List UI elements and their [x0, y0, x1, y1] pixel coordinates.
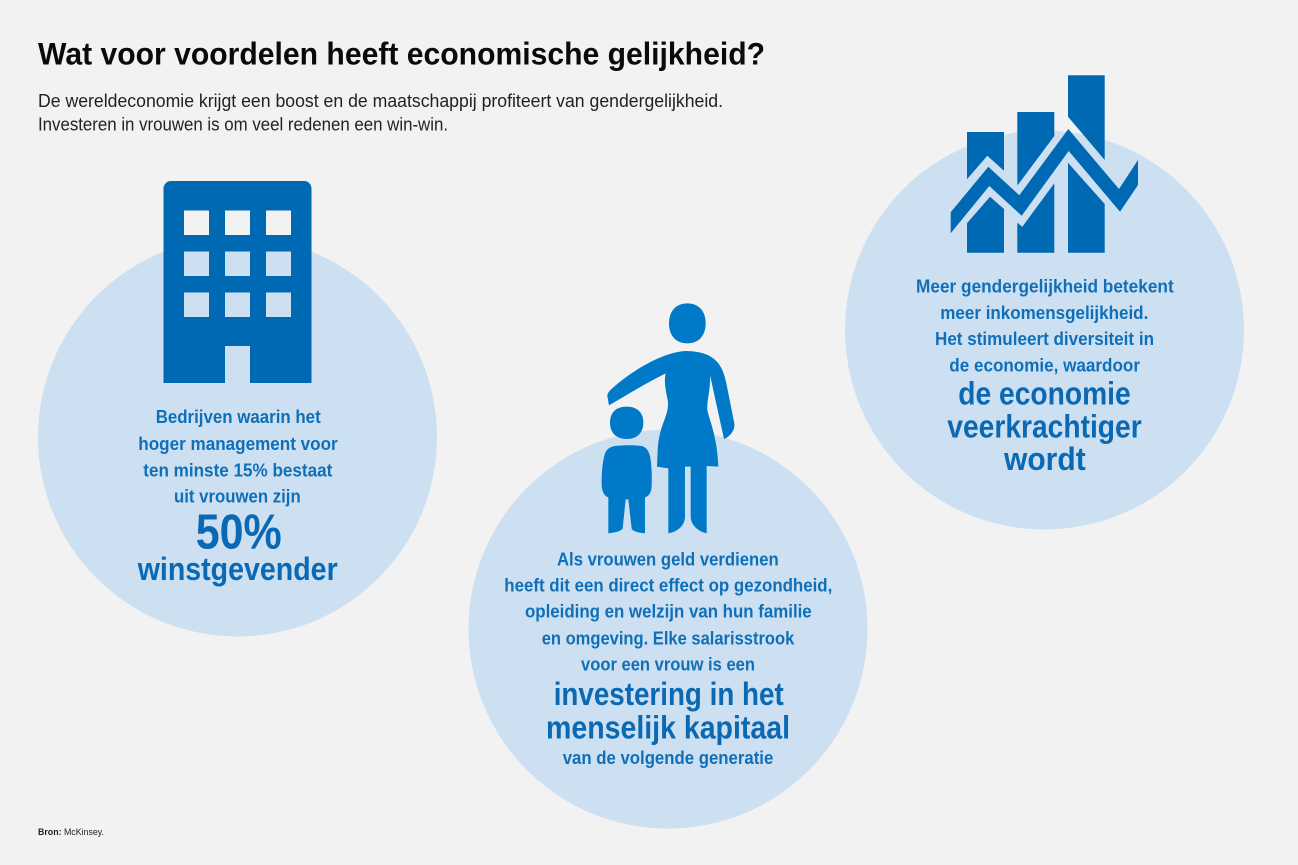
icon part: child head [610, 407, 643, 439]
panel: investering [468, 303, 868, 828]
highlight: de economie veerkrachtiger wordt: de economie [958, 375, 1131, 411]
highlight: de economie veerkrachtiger wordt: wordt [1003, 441, 1086, 477]
text: bedrijven statement: Bedrijven waarin het [156, 407, 321, 427]
text: economie statement: Meer gendergelijkheid betekent [916, 276, 1174, 296]
panel background circle: investering [468, 430, 868, 828]
highlight: de economie veerkrachtiger wordt [947, 375, 1142, 477]
highlight: investering in het menselijk kapitaal [546, 676, 790, 745]
text: economie statement: Het stimuleert diversiteit in [935, 329, 1154, 349]
text: investering statement: heeft dit een direct effect op gezondheid, [504, 576, 832, 596]
text: investering statement: voor een vrouw is een [581, 655, 755, 675]
text: bedrijven statement: uit vrouwen zijn [174, 486, 301, 506]
text: bedrijven statement: ten minste 15% bestaat [143, 460, 332, 480]
text: bedrijven statement [138, 407, 338, 506]
highlight: investering in het menselijk kapitaal: menselijk kapitaal [546, 709, 790, 745]
text: investering statement: opleiding en welzijn van hun familie [525, 602, 812, 622]
icon: woman and child [602, 303, 734, 533]
text: economie statement [916, 276, 1174, 376]
icon: bar chart with zigzag line [951, 75, 1138, 253]
intro text: De wereldeconomie krijgt een boost en de maatschappij profiteert van gendergelijkheid. [38, 91, 723, 111]
highlight: 50% winstgevender [137, 505, 338, 587]
highlight: investering in het menselijk kapitaal: investering in het [554, 676, 784, 712]
icon part: woman head [669, 303, 706, 343]
text: van de volgende generatie: van de volgende generatie [563, 748, 773, 768]
highlight: de economie veerkrachtiger wordt: veerkrachtiger [947, 409, 1142, 445]
icon: office building [164, 181, 312, 383]
highlight: 50% winstgevender: 50% [196, 505, 282, 559]
icon part: woman body [607, 351, 734, 533]
text: investering statement: Als vrouwen geld verdienen [557, 550, 779, 570]
panel: economie [845, 75, 1244, 530]
text: economie statement: meer inkomensgelijkheid. [940, 303, 1148, 323]
highlight: 50% winstgevender: winstgevender [137, 551, 338, 587]
text: investering statement: en omgeving. Elke salarisstrook [542, 628, 795, 648]
text: bedrijven statement: hoger management voor [138, 434, 338, 454]
panel: bedrijven [38, 181, 437, 636]
intro text [38, 91, 723, 134]
source note: Bron: McKinsey. [38, 827, 104, 838]
intro text: Investeren in vrouwen is om veel redenen een win-win. [38, 114, 448, 134]
panel background circle: bedrijven [38, 238, 437, 636]
text: investering statement [504, 550, 832, 675]
text: economie statement: de economie, waardoor [949, 356, 1140, 376]
panel background circle: economie [845, 130, 1244, 530]
icon part: child body [602, 445, 652, 533]
title: Wat voor voordelen heeft economische gelijkheid? [38, 36, 765, 72]
